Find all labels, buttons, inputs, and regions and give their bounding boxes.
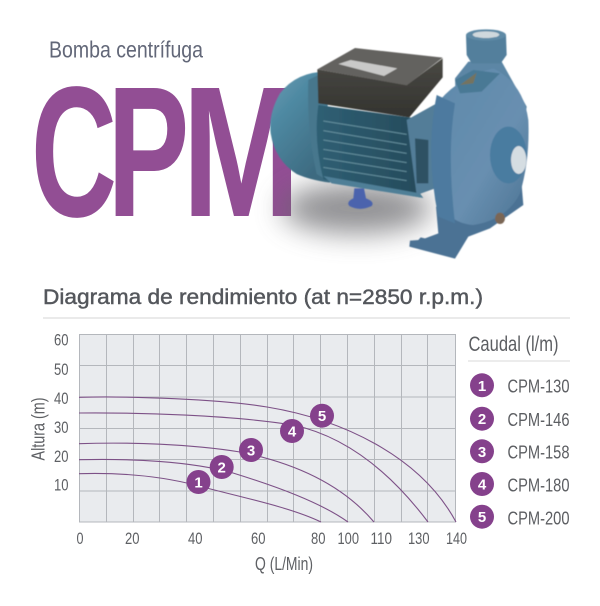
- legend item 3: [470, 439, 570, 463]
- heading: CPM: M: [182, 49, 301, 256]
- section heading: performance diagram: Diagrama de rendimiento (at n=2850 r.p.m.): [43, 286, 483, 309]
- x axis labels: 0: [76, 530, 84, 548]
- x axis labels: 140: [446, 530, 467, 548]
- rubber foot: [348, 188, 373, 209]
- legend item 3: CPM-158: [508, 442, 570, 463]
- legend: [468, 333, 570, 529]
- curve marker 5: 5: [318, 408, 326, 425]
- legend item 4: 4: [478, 476, 487, 494]
- legend item 1: CPM-130: [508, 376, 570, 397]
- legend item 4: [470, 472, 570, 496]
- legend item 2: 2: [478, 411, 486, 428]
- curve marker 2: 2: [218, 460, 226, 476]
- x axis labels: 20: [125, 530, 140, 548]
- x axis labels: 60: [251, 530, 266, 548]
- terminal box label: [338, 60, 397, 76]
- x axis labels: 80: [311, 530, 326, 548]
- y axis labels: 30: [54, 419, 68, 437]
- outlet stem: [455, 62, 527, 153]
- legend item 5: 5: [478, 509, 486, 526]
- inlet port: [490, 127, 527, 183]
- legend item 5: CPM-200: [508, 508, 570, 529]
- performance chart: [28, 332, 467, 574]
- legend item 4: CPM-180: [508, 474, 570, 495]
- y axis labels: [54, 332, 68, 495]
- plot area: [79, 334, 456, 522]
- curve marker 4: [280, 419, 304, 443]
- motor end dome: [270, 72, 330, 183]
- motor fin lines: [323, 121, 407, 181]
- motor finned body: [317, 105, 420, 197]
- curve marker 3: 3: [247, 442, 255, 460]
- y axis labels: 60: [54, 332, 68, 350]
- y axis labels: 20: [54, 448, 68, 466]
- heading: CPM: C: [31, 49, 117, 256]
- curve marker 2: [210, 455, 234, 479]
- curve marker 1: 1: [194, 474, 203, 492]
- motor underside: [323, 176, 423, 198]
- connector neck: [407, 103, 440, 195]
- y axis labels: 10: [54, 477, 68, 495]
- housing foot: [409, 185, 523, 259]
- outlet port: [466, 35, 507, 63]
- x axis labels: 40: [188, 530, 202, 548]
- legend item 3: 3: [478, 444, 486, 461]
- pump artwork: [270, 29, 529, 259]
- legend item 2: CPM-146: [508, 409, 570, 430]
- terminal box sides: [317, 58, 443, 117]
- legend item 5: [470, 505, 570, 529]
- subtitle: Bomba centrífuga: Bomba centrífuga: [49, 36, 203, 62]
- y axis title: Altura (m): [28, 398, 48, 460]
- y axis labels: 40: [54, 390, 68, 408]
- legend item 1: 1: [478, 378, 486, 395]
- x axis labels: [76, 530, 467, 548]
- heading: CPM: P: [107, 48, 189, 256]
- drain plug: [495, 213, 505, 224]
- performance curves: [79, 397, 456, 522]
- x axis labels: 110: [370, 530, 392, 548]
- curve marker 3: [239, 438, 263, 462]
- curve marker 4: 4: [288, 424, 297, 440]
- terminal box top: [317, 48, 443, 85]
- curve marker 1: [186, 470, 210, 494]
- motor band: [308, 73, 327, 180]
- legend item 2: [470, 407, 570, 431]
- illustration: centrifugal pump: [270, 29, 529, 259]
- y axis labels: 50: [54, 361, 68, 379]
- x axis labels: 100: [338, 530, 359, 548]
- curve marker 5: [310, 404, 334, 428]
- legend item 1: [470, 373, 570, 397]
- heading: CPM: [31, 48, 301, 256]
- x axis labels: 130: [408, 530, 430, 548]
- pump floor shadow: [282, 183, 432, 233]
- legend heading: Caudal (l/m): [468, 333, 558, 356]
- x axis title: Q (L/Min): [255, 554, 313, 574]
- pump housing: [433, 68, 529, 225]
- housing flange: [431, 95, 455, 223]
